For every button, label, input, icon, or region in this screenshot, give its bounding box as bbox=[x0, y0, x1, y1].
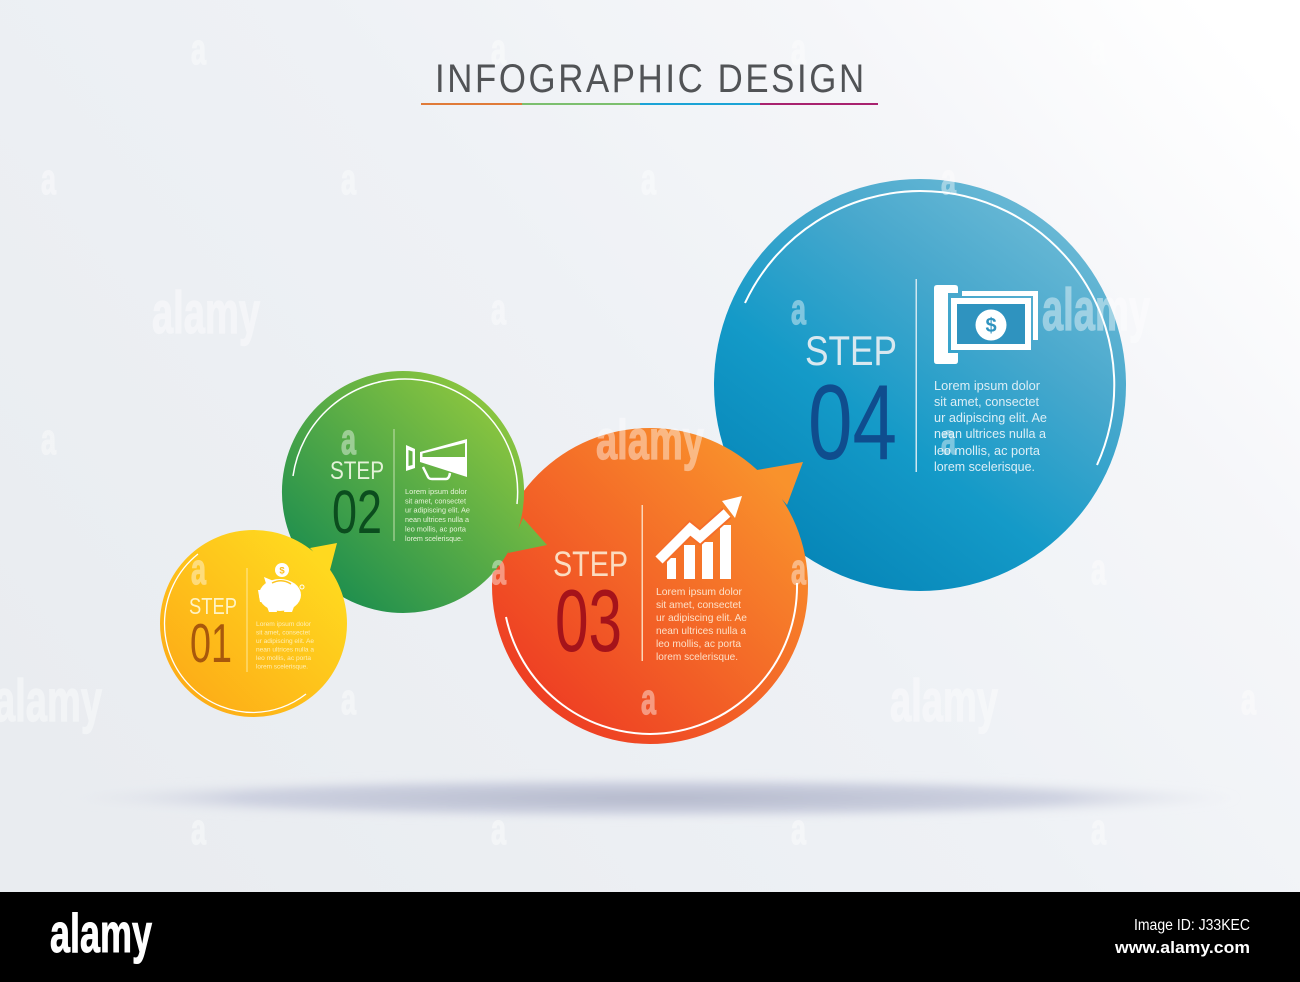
step 04 number: 04 bbox=[808, 362, 897, 482]
step 04 text: sit amet, consectet bbox=[934, 394, 1039, 409]
watermarks: a bbox=[791, 805, 806, 854]
panel: step 03 bbox=[492, 428, 808, 744]
footer bar bbox=[0, 892, 1300, 982]
step 02 label: STEP bbox=[330, 457, 384, 485]
step 02 text: lorem scelerisque. bbox=[405, 534, 463, 543]
step 01 text bbox=[256, 621, 314, 670]
watermarks: a bbox=[641, 675, 656, 724]
step 03 label: STEP bbox=[553, 545, 628, 584]
watermarks: a bbox=[491, 285, 506, 334]
divider bbox=[916, 279, 917, 472]
watermarks: a bbox=[1091, 545, 1106, 594]
watermarks: alamy bbox=[596, 408, 704, 471]
ring: step 02 bbox=[293, 379, 518, 504]
icon: money bbox=[934, 285, 1038, 364]
website: www.alamy.com bbox=[1114, 938, 1250, 957]
step 03 number: 03 bbox=[555, 571, 622, 670]
watermarks: a bbox=[41, 155, 56, 204]
watermarks: a bbox=[491, 805, 506, 854]
step 02 text: leo mollis, ac porta bbox=[405, 524, 467, 534]
ring: step 04 bbox=[745, 191, 1114, 465]
step 01 text: Lorem ipsum dolor bbox=[256, 621, 312, 628]
bubble: step 04 bbox=[714, 179, 1126, 591]
title underline bbox=[421, 103, 878, 105]
watermarks: alamy bbox=[152, 280, 260, 346]
step 03 text: leo mollis, ac porta bbox=[656, 638, 741, 650]
watermarks: a bbox=[491, 25, 506, 74]
step 02 text bbox=[405, 487, 470, 543]
watermarks: a bbox=[341, 675, 356, 724]
divider bbox=[642, 505, 643, 661]
step 04 text bbox=[934, 378, 1047, 474]
watermarks: a bbox=[41, 415, 56, 464]
watermarks: a bbox=[191, 545, 206, 594]
icon: piggy bank bbox=[258, 563, 304, 612]
watermarks: a bbox=[191, 805, 206, 854]
panel: step 01 bbox=[160, 530, 347, 717]
step 01 text: lorem scelerisque. bbox=[256, 664, 308, 670]
panel: step 02 bbox=[282, 371, 547, 613]
step 01 text: ur adipiscing elit. Ae bbox=[256, 638, 314, 645]
step 02 text: Lorem ipsum dolor bbox=[405, 487, 467, 496]
step 01 label: STEP bbox=[189, 593, 237, 619]
step 03 text: sit amet, consectet bbox=[656, 599, 741, 611]
step 01 text: leo mollis, ac porta bbox=[256, 655, 311, 662]
step 03 text: ur adipiscing elit. Ae bbox=[656, 612, 747, 624]
watermarks: a bbox=[791, 545, 806, 594]
divider bbox=[246, 568, 248, 672]
step 02 text: ur adipiscing elit. Ae bbox=[405, 506, 470, 515]
watermarks: a bbox=[491, 545, 506, 594]
watermarks: a bbox=[791, 25, 806, 74]
step 01 text: sit amet, consectet bbox=[256, 630, 310, 636]
step 03 text: nean ultrices nulla a bbox=[656, 625, 746, 637]
step 02 text: nean ultrices nulla a bbox=[405, 515, 470, 524]
step 02 number: 02 bbox=[332, 478, 382, 546]
step 04 label: STEP bbox=[805, 327, 897, 374]
step 04 text: ur adipiscing elit. Ae bbox=[934, 410, 1047, 425]
watermarks: a bbox=[341, 155, 356, 204]
divider bbox=[394, 429, 395, 541]
step 04 text: leo mollis, ac porta bbox=[934, 443, 1041, 458]
ring: step 03 bbox=[506, 583, 797, 734]
icon: megaphone bbox=[406, 439, 467, 479]
watermarks: a bbox=[1241, 675, 1256, 724]
bubble: step 01 bbox=[160, 530, 347, 717]
watermarks: a bbox=[791, 285, 806, 334]
step 01 text: nean ultrices nulla a bbox=[256, 646, 314, 654]
floor shadow bbox=[60, 777, 1240, 819]
watermarks: alamy bbox=[1042, 277, 1150, 343]
step 03 text bbox=[656, 586, 747, 663]
watermarks: a bbox=[941, 415, 956, 464]
watermarks: a bbox=[341, 415, 356, 464]
icon: piggy bank: $ bbox=[279, 566, 285, 576]
watermarks: a bbox=[191, 25, 206, 74]
icon: growth chart bbox=[659, 496, 742, 579]
step 04 text: Lorem ipsum dolor bbox=[934, 378, 1041, 393]
step 01 number: 01 bbox=[190, 612, 232, 674]
step 03 text: Lorem ipsum dolor bbox=[656, 586, 742, 598]
bubble: step 02 bbox=[282, 371, 547, 613]
watermarks: a bbox=[1091, 25, 1106, 74]
ring: step 01 bbox=[164, 554, 306, 712]
step 03 text: lorem scelerisque. bbox=[656, 651, 738, 663]
step 04 text: lorem scelerisque. bbox=[934, 459, 1035, 474]
watermarks: alamy bbox=[890, 668, 998, 734]
image id: Image ID: J33KEC bbox=[1134, 917, 1250, 934]
watermarks: a bbox=[641, 155, 656, 204]
panel: step 04 bbox=[714, 179, 1126, 591]
icon: money: $ bbox=[985, 315, 997, 337]
watermarks: a bbox=[1091, 805, 1106, 854]
step 04 text: nean ultrices nulla a bbox=[934, 426, 1047, 441]
bubble: step 03 bbox=[492, 428, 808, 744]
footer logo: alamy bbox=[50, 902, 152, 964]
step 02 text: sit amet, consectet bbox=[405, 496, 467, 506]
watermarks: a bbox=[941, 155, 956, 204]
title: INFOGRAPHIC DESIGN bbox=[435, 56, 867, 101]
